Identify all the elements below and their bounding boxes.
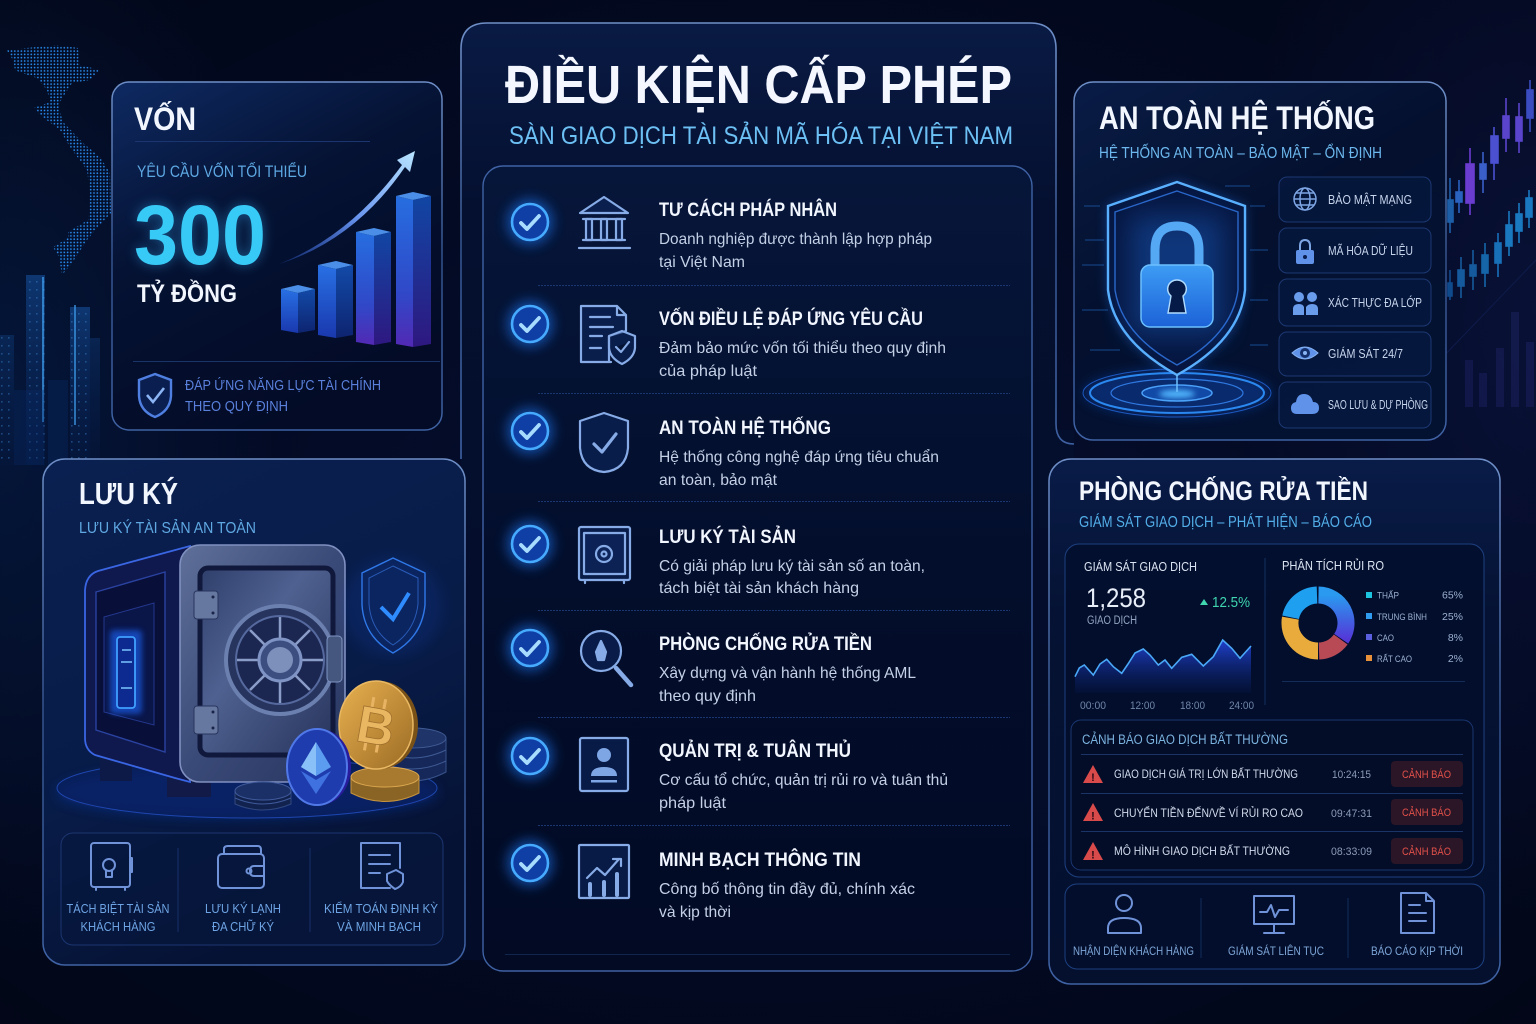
row: quản trị & tuân thủ: [507, 733, 948, 812]
alert row 1: CẢNH BÁO: [1402, 768, 1451, 781]
row: vốn điều lệ: [507, 301, 946, 380]
feature: nhận diện khách hàng: NHẬN DIỆN KHÁCH HÀNG: [1073, 943, 1194, 958]
panel: lưu ký: [43, 459, 465, 965]
legend: 25%: [1442, 611, 1463, 623]
alert row 2: 09:47:31: [1331, 808, 1372, 820]
feature: kiểm toán định kỳ: VÀ MINH BẠCH: [337, 919, 421, 934]
transaction monitoring: [1075, 559, 1254, 712]
alert row 1: [1083, 761, 1463, 787]
icon: magnifier: [581, 631, 631, 685]
row: tư cách pháp nhân: tại Việt Nam: [659, 254, 745, 271]
legend: 65%: [1442, 590, 1463, 602]
note: năng lực tài chính: THEO QUY ĐỊNH: [185, 399, 288, 415]
item: bảo mật mạng: [1279, 177, 1431, 222]
feature: kiểm toán định kỳ: KIỂM TOÁN ĐỊNH KỲ: [324, 901, 438, 916]
background candlestick chart: [1440, 80, 1536, 407]
big number: 300: 300: [134, 188, 266, 282]
alert row 3: [1083, 838, 1463, 864]
subtitle: an toàn bảo mật ổn định: HỆ THỐNG AN TOÀN – BẢO MẬT – ỔN ĐỊNH: [1099, 142, 1382, 162]
item: mã hóa dữ liệu: [1279, 228, 1431, 273]
legend: CAO: [1377, 633, 1394, 644]
row: an toàn hệ thống: an toàn, bảo mật: [659, 472, 778, 489]
alert row 2: [1083, 799, 1463, 825]
donut chart: [1290, 595, 1346, 651]
feature: tách biệt tài sản: TÁCH BIỆT TÀI SẢN: [66, 901, 170, 916]
alert row 2: CẢNH BÁO: [1402, 806, 1451, 819]
item: giám sát 24/7: GIÁM SÁT 24/7: [1328, 346, 1403, 361]
row: an toàn hệ thống: [507, 408, 939, 489]
row: phòng chống rửa tiền: [507, 625, 916, 705]
subtitle: SÀN GIAO DỊCH TÀI SẢN MÃ HÓA TẠI VIỆT NAM: [509, 120, 1013, 150]
row: minh bạch thông tin: MINH BẠCH THÔNG TIN: [659, 847, 861, 871]
alert row 2: !: [1091, 810, 1095, 822]
row: quản trị & tuân thủ: Cơ cấu tổ chức, quản trị rủi ro và tuân thủ: [659, 771, 948, 789]
row: tư cách pháp nhân: Doanh nghiệp được thành lập hợp pháp: [659, 231, 932, 248]
line chart: 24:00: [1229, 700, 1254, 712]
heading: vốn: VỐN: [134, 101, 196, 137]
bar chart with arrow: [279, 151, 431, 347]
label: yêu cầu vốn tối thiểu: YÊU CẦU VỐN TỐI THIỂU: [137, 161, 307, 181]
line chart: [1075, 640, 1254, 712]
item: bảo mật mạng: BẢO MẬT MẠNG: [1328, 192, 1412, 207]
icon: institution: [579, 197, 630, 248]
line chart: 18:00: [1180, 700, 1205, 712]
illustration: shield with lock: [1082, 182, 1271, 417]
feature: giám sát liên tục: GIÁM SÁT LIÊN TỤC: [1228, 943, 1324, 958]
panel: phòng chống rửa tiền: [1049, 459, 1500, 984]
feature: kiểm toán định kỳ: [324, 843, 438, 934]
item: xác thực đa lớp: [1279, 279, 1431, 326]
row: lưu ký tài sản: LƯU KÝ TÀI SẢN: [659, 524, 796, 548]
item: xác thực đa lớp: XÁC THỰC ĐA LỚP: [1328, 295, 1422, 310]
line chart: 00:00: [1080, 700, 1106, 712]
icon: safe: [579, 527, 630, 583]
row: quản trị & tuân thủ: QUẢN TRỊ & TUÂN THỦ: [659, 738, 851, 762]
row: minh bạch thông tin: Công bố thông tin đầy đủ, chính xác: [659, 881, 915, 898]
subtitle: lưu ký tài sản an toàn: LƯU KÝ TÀI SẢN AN TOÀN: [79, 518, 256, 537]
illustration: safe with coins: B: [352, 695, 399, 759]
icon: profile card: [580, 738, 628, 791]
heading: phòng chống rửa tiền: PHÒNG CHỐNG RỬA TIỀN: [1079, 474, 1368, 506]
security feature list: [1279, 177, 1431, 428]
feature: lưu ký lạnh: [205, 846, 281, 934]
item: sao lưu & dự phòng: [1279, 382, 1431, 428]
legend: 2%: [1448, 653, 1463, 665]
transaction monitoring: 1,258: [1086, 583, 1146, 613]
legend: RẤT CAO: [1377, 654, 1412, 665]
row: tư cách pháp nhân: TƯ CÁCH PHÁP NHÂN: [659, 197, 837, 221]
alert row 1: 10:24:15: [1332, 769, 1371, 781]
row: phòng chống rửa tiền: PHÒNG CHỐNG RỬA TIỀN: [659, 631, 872, 655]
row: phòng chống rửa tiền: Xây dựng và vận hành hệ thống AML: [659, 665, 916, 682]
icon: growth chart: [579, 845, 629, 898]
transaction monitoring: GIAO DỊCH: [1087, 615, 1137, 627]
panel: an toàn hệ thống: [1074, 82, 1446, 440]
background city skyline: [0, 275, 100, 468]
transaction monitoring: 12.5%: [1212, 595, 1250, 611]
big number: 300: 300: [134, 188, 266, 282]
panel: checklist: [483, 166, 1032, 971]
panel: center outer frame: [461, 23, 1074, 960]
feature: tách biệt tài sản: KHÁCH HÀNG: [80, 919, 156, 934]
icon: shield check: [139, 374, 171, 417]
item: mã hóa dữ liệu: MÃ HÓA DỮ LIỆU: [1328, 243, 1413, 258]
alert row 3: 08:33:09: [1331, 846, 1372, 858]
dashboard: [1065, 544, 1484, 877]
transaction monitoring: GIÁM SÁT GIAO DỊCH: [1084, 559, 1197, 574]
icon: document with shield: [581, 306, 635, 364]
bottom feature row: [1065, 884, 1484, 969]
legend: [1366, 590, 1463, 665]
panel: vốn: [112, 82, 442, 430]
note: năng lực tài chính: ĐÁP ỨNG NĂNG LỰC TÀI CHÍNH: [185, 377, 381, 394]
subtitle: giám sát phát hiện báo cáo: GIÁM SÁT GIAO DỊCH – PHÁT HIỆN – BÁO CÁO: [1079, 514, 1372, 531]
row: vốn điều lệ: Đảm bảo mức vốn tối thiểu theo quy định: [659, 339, 946, 357]
feature: tách biệt tài sản: [66, 843, 170, 934]
feature: báo cáo kịp thời: [1371, 893, 1463, 958]
alert row 1: GIAO DỊCH GIÁ TRỊ LỚN BẤT THƯỜNG: [1114, 766, 1298, 781]
alert row 1: !: [1091, 772, 1095, 784]
feature: lưu ký lạnh: LƯU KÝ LẠNH: [205, 901, 281, 916]
background map of Vietnam (dotted): [7, 45, 111, 275]
legend: TRUNG BÌNH: [1377, 612, 1427, 623]
row: lưu ký tài sản: tách biệt tài sản khách hàng: [659, 580, 859, 597]
row: quản trị & tuân thủ: pháp luật: [659, 795, 727, 812]
row: lưu ký tài sản: [507, 521, 925, 597]
row: an toàn hệ thống: Hệ thống công nghệ đáp ứng tiêu chuẩn: [659, 448, 939, 466]
alerts table: [1071, 720, 1473, 870]
feature: báo cáo kịp thời: BÁO CÁO KỊP THỜI: [1371, 943, 1463, 958]
alert row 3: !: [1091, 850, 1095, 862]
alert row 3: CẢNH BÁO: [1402, 845, 1451, 858]
row: vốn điều lệ: của pháp luật: [659, 363, 758, 380]
risk analysis: [1282, 558, 1465, 682]
line chart: 12:00: [1130, 700, 1155, 712]
alert row 3: MÔ HÌNH GIAO DỊCH BẤT THƯỜNG: [1114, 843, 1290, 858]
row: minh bạch thông tin: và kịp thời: [659, 904, 731, 921]
title: ĐIỀU KIỆN CẤP PHÉP: [505, 54, 1012, 115]
feature: nhận diện khách hàng: [1073, 895, 1194, 958]
row: phòng chống rửa tiền: theo quy định: [659, 688, 756, 705]
feature row: [61, 833, 443, 945]
row: an toàn hệ thống: AN TOÀN HỆ THỐNG: [659, 415, 831, 439]
risk analysis: PHÂN TÍCH RỦI RO: [1282, 558, 1384, 573]
heading: an toàn hệ thống: AN TOÀN HỆ THỐNG: [1099, 100, 1375, 136]
item: sao lưu & dự phòng: SAO LƯU & DỰ PHÒNG: [1328, 397, 1428, 412]
legend: THẤP: [1377, 590, 1399, 602]
unit: tỷ đồng: TỶ ĐỒNG: [137, 278, 237, 308]
row: minh bạch thông tin: [507, 840, 915, 921]
alerts table: CẢNH BÁO GIAO DỊCH BẤT THƯỜNG: [1082, 732, 1288, 747]
note: năng lực tài chính: [185, 377, 381, 415]
illustration: safe with coins: [57, 545, 446, 818]
legend: 8%: [1448, 632, 1463, 644]
feature: giám sát liên tục: [1228, 896, 1324, 958]
icon: shield: [580, 413, 628, 472]
row: vốn điều lệ: VỐN ĐIỀU LỆ ĐÁP ỨNG YÊU CẦU: [659, 306, 923, 330]
row: tư cách pháp nhân: [507, 197, 932, 271]
heading: lưu ký: LƯU KÝ: [79, 476, 178, 511]
row: lưu ký tài sản: Có giải pháp lưu ký tài sản số an toàn,: [659, 558, 925, 575]
alert row 2: CHUYỂN TIỀN ĐẾN/VỀ VÍ RỦI RO CAO: [1114, 805, 1303, 820]
item: giám sát 24/7: [1279, 332, 1431, 376]
feature: lưu ký lạnh: ĐA CHỮ KÝ: [212, 919, 274, 934]
